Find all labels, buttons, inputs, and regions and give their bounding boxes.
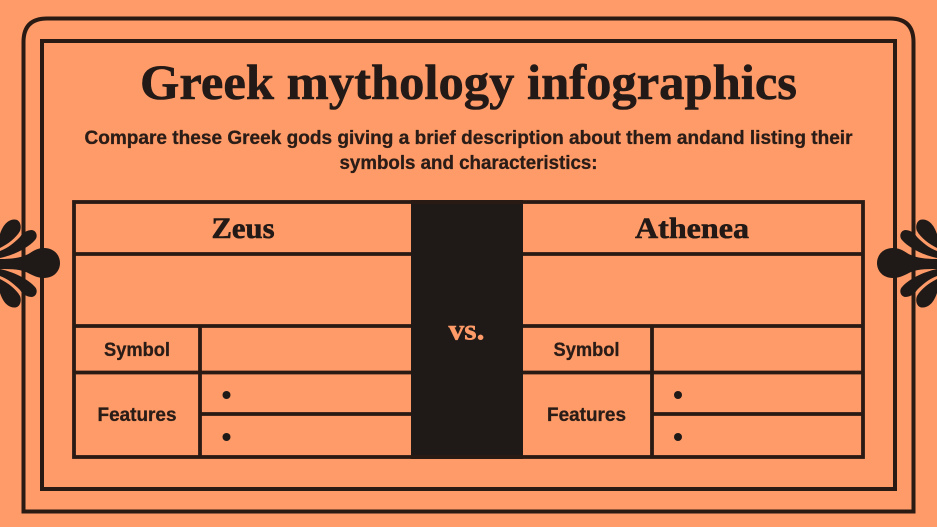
table grid — [74, 202, 863, 457]
ornament: left — [0, 219, 60, 308]
ornament: right — [877, 219, 937, 308]
comparison table — [74, 200, 863, 459]
subtitle: symbols and characteristics: — [340, 153, 598, 174]
inner frame — [42, 41, 895, 489]
vs column — [411, 200, 523, 459]
label: Symbol right: Symbol — [554, 340, 620, 361]
title: Greek mythology infographics — [140, 54, 797, 110]
label: Symbol left: Symbol — [104, 340, 170, 361]
bullets — [222, 391, 682, 441]
label: Features left: Features — [98, 405, 176, 426]
heading: Athenea: Athenea — [635, 212, 749, 245]
subtitle — [84, 128, 853, 174]
heading: Zeus: Zeus — [212, 212, 274, 245]
subtitle: Compare these Greek gods giving a brief description about them andand listing their — [84, 128, 853, 149]
vs label: vs. — [448, 314, 484, 346]
label: Features right: Features — [547, 405, 626, 426]
